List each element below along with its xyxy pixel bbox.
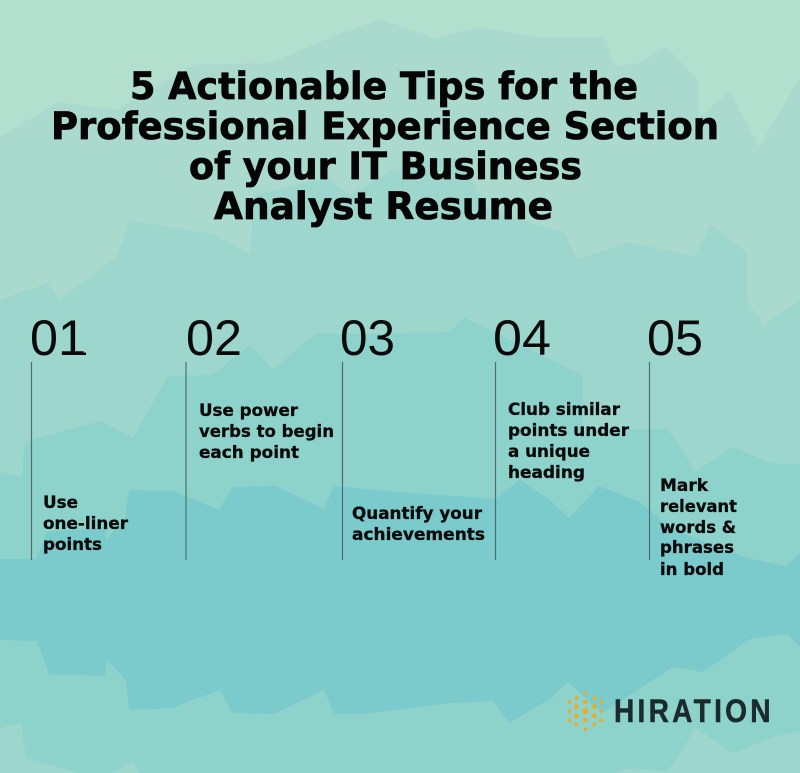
tip 05: Mark (660, 476, 709, 495)
tip 04: heading (508, 463, 585, 482)
title: Analyst Resume (214, 184, 553, 228)
tip 01: one-liner (43, 514, 129, 533)
title: 5 Actionable Tips for the (130, 64, 638, 108)
title (51, 64, 719, 228)
tip 03: Quantify your (352, 504, 483, 523)
tip 02: each point (199, 443, 299, 462)
tip 02: Use power (199, 401, 299, 420)
tip 02: verbs to begin (199, 422, 334, 441)
tip 01: Use (43, 493, 78, 512)
tip 01: 01 (30, 310, 86, 366)
tip 03 (340, 310, 485, 560)
tip 05: in bold (660, 560, 724, 579)
tip 02: 02 (186, 310, 242, 366)
title: of your IT Business (189, 144, 582, 188)
tip 05: phrases (660, 538, 734, 557)
tip 04: points under (508, 421, 630, 440)
logo: Hiration (567, 691, 771, 731)
tip 03: achievements (352, 525, 485, 544)
tip 05 (647, 310, 737, 579)
wordmark: HIRATION (614, 694, 771, 729)
tip 04: a unique (508, 442, 590, 461)
tip 01: points (43, 535, 102, 554)
tip 05: relevant (660, 497, 737, 516)
tip 03: 03 (340, 310, 395, 366)
tip 02 (186, 310, 334, 560)
title: Professional Experience Section (51, 104, 719, 148)
tip 05: words & (660, 518, 736, 537)
icon: orange dot burst (567, 691, 603, 731)
tip 01 (30, 310, 129, 560)
tip 04: Club similar (508, 400, 621, 419)
tip 04 (493, 310, 630, 560)
tip 05: 05 (647, 310, 703, 366)
tip 04: 04 (493, 310, 551, 366)
